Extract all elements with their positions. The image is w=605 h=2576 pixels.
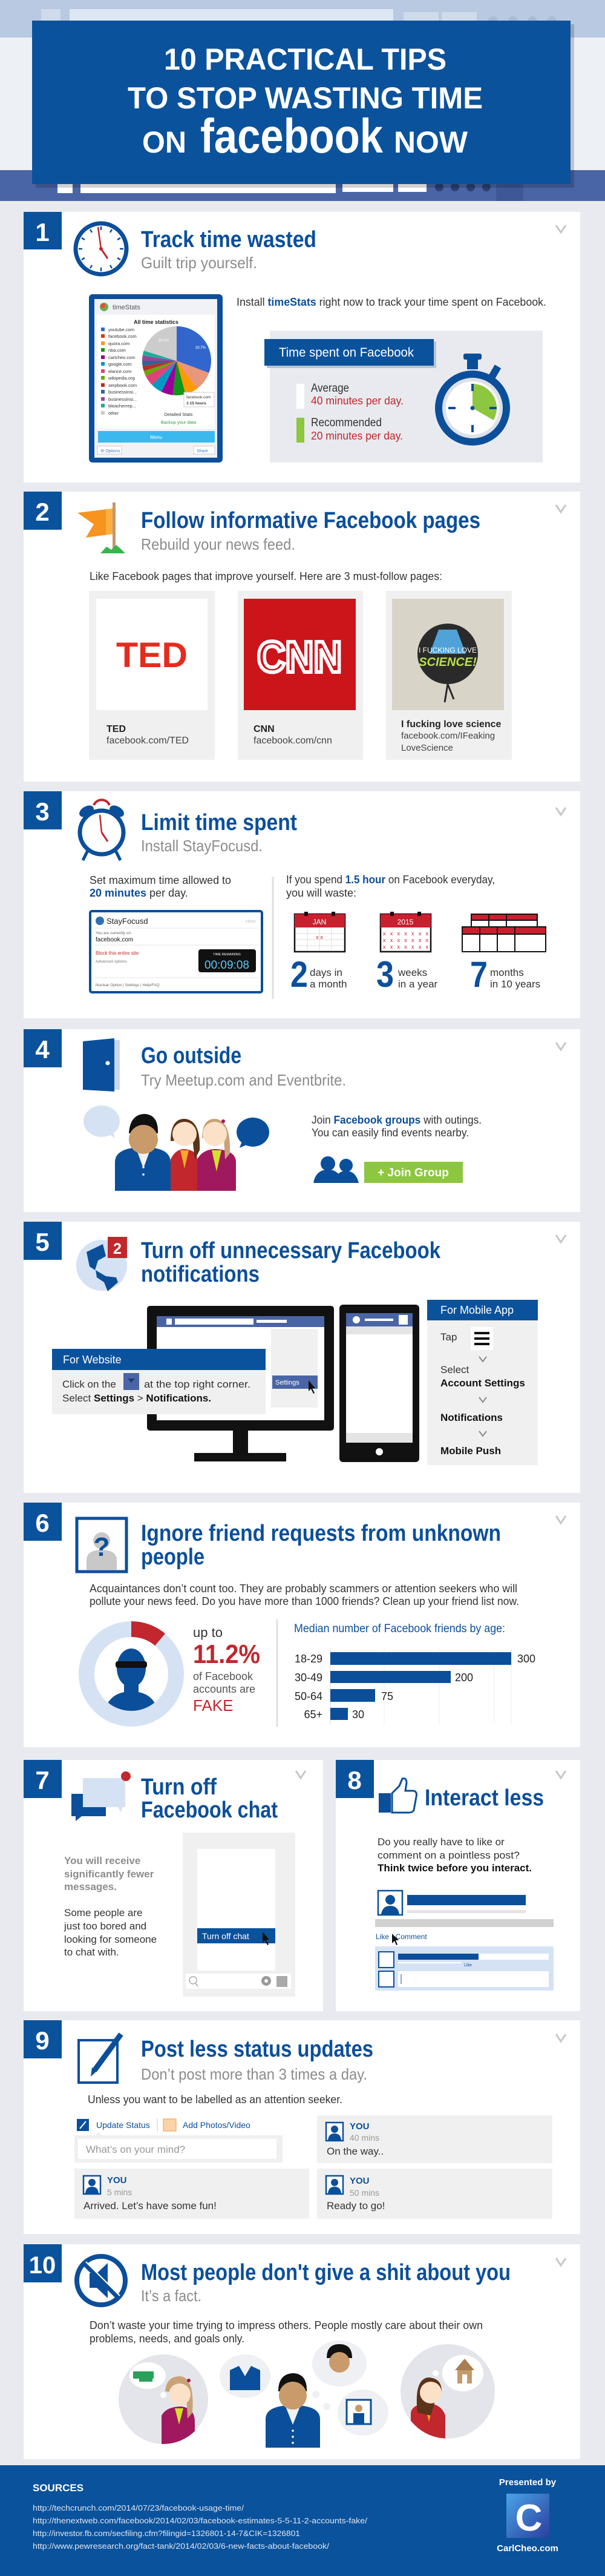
timeStats screenshot: wikipedia.org	[108, 375, 135, 381]
icon: calendar JAN	[295, 912, 345, 952]
panel: for mobile app: Account Settings	[440, 1377, 525, 1389]
chat sidebar mock	[183, 1833, 295, 1997]
bar chart: median friends by age: 75	[381, 1690, 393, 1702]
icon: calendars stack	[462, 914, 546, 952]
time spent box: Average	[311, 382, 349, 395]
text 7: to chat with.	[64, 1946, 119, 1958]
icon: clock	[76, 223, 126, 274]
text: if you spend: you will waste:	[286, 887, 356, 899]
install text: Install timeStats right now to track your time spent on Facebook.	[237, 296, 546, 308]
StayFocusd screenshot: Advanced options	[96, 960, 127, 964]
stat: 11.2% fake: 11.2%	[193, 1639, 260, 1669]
heading 3: Install StayFocusd.	[141, 837, 263, 855]
title banner: facebook	[200, 109, 383, 163]
icon: group	[313, 1156, 359, 1183]
timeStats screenshot: 1:15 hours	[186, 401, 206, 406]
timeStats screenshot: businessinsi...	[108, 397, 137, 402]
StayFocusd screenshot: StayFocusd	[106, 917, 148, 926]
heading 10: Most people don't give a shit about you	[141, 2260, 511, 2285]
number 1	[24, 212, 62, 249]
header background	[0, 0, 605, 201]
post: 50 mins: YOU	[350, 2176, 370, 2186]
sources: http://investor.fb.com/secfiling.cfm?filingid=1326801-14-7&CIK=1326801	[33, 2529, 300, 2538]
timeStats screenshot: other	[108, 410, 119, 416]
number 6: 6	[35, 1509, 50, 1537]
text: join groups: Join Facebook groups with outings.	[312, 1114, 482, 1126]
heading 8: Interact less	[425, 1785, 544, 1811]
card: CNN: facebook.com/cnn	[253, 736, 332, 746]
footer: sources and credit	[0, 2465, 605, 2576]
text: set max time	[90, 874, 231, 899]
stat: 3 weeks: 3	[376, 954, 394, 995]
illustration: man thinking about himself	[220, 2340, 388, 2448]
status composer: Add Photos/Video	[183, 2120, 250, 2130]
monitor: Settings	[275, 1379, 299, 1386]
number 4: 4	[35, 1035, 50, 1064]
post: 40 mins	[317, 2115, 552, 2163]
pie chart	[142, 326, 211, 395]
icon: calendar 2015: xxxxxxx	[383, 937, 428, 943]
bar chart: median friends by age: 65+	[304, 1708, 322, 1721]
pie chart: 20.1%	[159, 339, 169, 343]
credit logo: Presented by	[499, 2477, 557, 2488]
number 2: 2	[35, 498, 50, 526]
text: if you spend	[286, 874, 495, 899]
panel 2: follow informative pages	[24, 492, 580, 782]
number 7: 7	[35, 1766, 50, 1794]
text: set max time: Set maximum time allowed to	[90, 874, 231, 886]
icon: stopwatch	[435, 354, 510, 446]
post: 5 mins: Arrived. Let’s have some fun!	[83, 2200, 217, 2212]
stat: 11.2% fake: accounts are	[193, 1683, 255, 1695]
timeStats screenshot	[89, 294, 223, 463]
stat: 2 days: 2	[290, 954, 308, 995]
panel 7: turn off chat	[24, 1760, 323, 2011]
text 7: just too bored and	[64, 1920, 146, 1932]
number 2	[24, 492, 62, 530]
icon: unknown person: ?	[94, 1532, 110, 1562]
card: CNN	[238, 591, 363, 760]
timeStats screenshot: carlcheo.com	[108, 355, 136, 360]
stat: 7 months: 7	[470, 954, 488, 995]
icon: flag	[77, 502, 125, 553]
stat: 2 days: days in	[310, 967, 342, 978]
card: TED	[89, 591, 215, 760]
time spent box	[264, 331, 543, 463]
heading 5	[141, 1238, 441, 1287]
sources: http://thenextweb.com/facebook/2014/02/03/facebook-estimates-5-5-11-2-accounts-fake/	[33, 2516, 367, 2525]
donut chart: fake accounts	[87, 1629, 176, 1719]
panel 6: ignore friend requests	[24, 1503, 580, 1747]
post: 5 mins: 5 mins	[107, 2187, 132, 2197]
heading 7: Facebook chat	[141, 1797, 278, 1823]
bar chart: median friends by age: 30-49	[295, 1672, 322, 1684]
card: CNN: CNN	[257, 633, 342, 682]
title banner: NOW	[394, 125, 468, 159]
sources: http://www.pewresearch.org/fact-tank/2014/02/03/6-new-facts-about-facebook/	[33, 2541, 329, 2551]
icon: chat bubbles	[71, 1771, 131, 1821]
number 10: 10	[29, 2252, 56, 2279]
panel: for mobile app: Tap	[440, 1331, 457, 1343]
text 7: significantly fewer	[64, 1868, 154, 1880]
status composer	[74, 2119, 283, 2163]
stat: 2 days	[290, 954, 347, 995]
card: I fucking love science: I FUCKING LOVE	[419, 646, 477, 654]
number 3: 3	[35, 797, 50, 826]
heading 7: Turn off	[141, 1774, 217, 1800]
heading 10: It’s a fact.	[141, 2287, 201, 2305]
text 7: Some people are	[64, 1907, 142, 1919]
number 10	[24, 2244, 62, 2282]
icon: calendar 2015	[381, 912, 431, 952]
number 5: 5	[35, 1228, 50, 1256]
paragraph 10	[90, 2319, 483, 2345]
stat: 11.2% fake: of Facebook	[193, 1670, 253, 1682]
heading 4: Try Meetup.com and Eventbrite.	[141, 1071, 346, 1089]
timeStats screenshot: bleacherrep...	[108, 403, 136, 409]
number 6	[24, 1503, 62, 1541]
card: I fucking love science	[386, 591, 512, 760]
heading 10	[141, 2260, 511, 2305]
sources: SOURCES	[33, 2482, 83, 2494]
time spent box: 40 minutes per day.	[311, 395, 404, 407]
icon: globe with badge	[76, 1237, 127, 1291]
heading 6: Ignore friend requests from unknown	[141, 1521, 501, 1546]
sources	[33, 2482, 367, 2551]
timeStats screenshot: All time statistics	[134, 319, 178, 325]
stat: 3 weeks	[376, 954, 438, 995]
stat: 2 days: a month	[310, 978, 347, 990]
stat: 3 weeks: in a year	[398, 978, 438, 990]
heading 5: notifications	[141, 1262, 260, 1287]
credit logo	[497, 2477, 558, 2554]
icon: calendar JAN: x x	[316, 934, 323, 940]
button: join group: + Join Group	[378, 1167, 449, 1179]
post: 5 mins	[74, 2169, 309, 2219]
panel 3: limit time spent	[24, 791, 580, 1018]
post: 5 mins: YOU	[107, 2175, 127, 2186]
heading 4	[141, 1043, 346, 1089]
bar chart: median friends by age: 30	[352, 1708, 364, 1721]
card: I fucking love science: facebook.com/IFeaking	[401, 731, 495, 741]
heading 3: Limit time spent	[141, 810, 297, 835]
StayFocusd screenshot: close	[246, 920, 255, 924]
text: if you spend: If you spend 1.5 hour on Facebook everyday,	[286, 874, 495, 886]
text: set max time: 20 minutes per day.	[90, 887, 188, 899]
text 8: Do you really have to like or	[378, 1836, 505, 1848]
heading 3	[141, 810, 297, 855]
StayFocusd screenshot	[90, 911, 262, 992]
panel 2: follow informative pages: Like Facebook pages that improve yourself. Here are 3 must-follow pages:	[90, 570, 442, 582]
heading 9	[141, 2037, 373, 2083]
heading 6: people	[141, 1544, 204, 1570]
heading 1: Guilt trip yourself.	[141, 254, 257, 272]
timeStats screenshot: facebook.com	[108, 334, 137, 339]
heading 2: Rebuild your news feed.	[141, 535, 295, 553]
text 7: messages.	[64, 1881, 117, 1892]
heading 4: Go outside	[141, 1043, 241, 1069]
panel: for website	[52, 1349, 266, 1414]
timeStats screenshot: elance.com	[108, 369, 131, 374]
post: 50 mins: 50 mins	[350, 2188, 379, 2198]
stat: 3 weeks: weeks	[397, 967, 427, 978]
post: 40 mins: 40 mins	[350, 2133, 379, 2143]
panel 1: track time wasted	[24, 212, 580, 483]
text 8	[378, 1836, 532, 1874]
panel: for website: Click on the	[62, 1379, 116, 1390]
text: join groups: You can easily find events nearby.	[312, 1127, 469, 1139]
post: 50 mins	[317, 2169, 552, 2219]
StayFocusd screenshot: You are currently on:	[96, 931, 132, 935]
text 8: comment on a pointless post?	[378, 1850, 520, 1861]
status composer: Update Status	[96, 2120, 150, 2130]
number 8: 8	[347, 1766, 362, 1794]
StayFocusd screenshot: 00:09:08	[204, 959, 249, 972]
text 7: You will receive	[64, 1855, 140, 1866]
icon: door	[83, 1038, 120, 1092]
StayFocusd screenshot: Block this entire site	[96, 950, 139, 956]
bar chart: median friends by age: 200	[455, 1672, 473, 1684]
button: join group	[364, 1162, 463, 1183]
title banner: TO STOP WASTING TIME	[128, 81, 483, 115]
post mock: Like · Comment	[376, 1932, 427, 1941]
text 8: Think twice before you interact.	[378, 1862, 532, 1874]
panel: for mobile app: For Mobile App	[440, 1304, 514, 1316]
icon: alarm clock	[77, 800, 126, 860]
timeStats screenshot: google.com	[108, 361, 132, 367]
credit logo: C	[515, 2497, 542, 2539]
icon: calendar 2015: xxxxxxx	[383, 931, 428, 937]
title banner	[32, 21, 574, 188]
illustration: three friends	[83, 1105, 269, 1191]
card: I fucking love science: SCIENCE!	[419, 656, 477, 669]
post mock	[375, 1891, 554, 1991]
number 1: 1	[35, 218, 50, 246]
panel: for mobile app: Notifications	[440, 1412, 503, 1423]
stat: 11.2% fake	[193, 1625, 260, 1715]
panel: for website: Select Settings > Notifications.	[62, 1392, 211, 1404]
card: TED: TED	[116, 636, 188, 675]
heading 9: Don’t post more than 3 times a day.	[141, 2065, 367, 2083]
paragraph 6: Acquaintances don’t count too. They are probably scammers or attention seekers who will	[90, 1583, 517, 1595]
icon: muted speaker	[77, 2256, 125, 2305]
heading 7	[141, 1774, 278, 1823]
text: join groups	[312, 1114, 482, 1139]
text 7	[64, 1855, 157, 1958]
title banner: ON	[142, 125, 186, 159]
illustration: woman thinking about home	[401, 2344, 495, 2440]
card: CNN: CNN	[253, 724, 275, 734]
icon: calendar 2015: 2015	[397, 918, 414, 926]
time spent box: 20 minutes per day.	[311, 430, 403, 442]
text 7: looking for someone	[64, 1934, 157, 1945]
timeStats screenshot: Menu	[150, 435, 162, 440]
card: TED: TED	[106, 724, 126, 734]
paragraph 6: pollute your news feed. Do you have more than 1000 friends? Clean up your friend list now.	[90, 1595, 519, 1607]
stat: 7 months	[470, 954, 540, 995]
timeStats screenshot: Backup your data	[161, 420, 197, 425]
timeStats screenshot: nba.com	[108, 348, 126, 353]
post: 40 mins: On the way..	[327, 2146, 384, 2157]
icon: pencil and pad	[79, 2034, 121, 2083]
title banner: 10 PRACTICAL TIPS	[164, 42, 446, 76]
number 8	[336, 1760, 374, 1798]
heading 2	[141, 508, 480, 553]
heading 5: Turn off unnecessary Facebook	[141, 1238, 441, 1263]
time spent box: Recommended	[311, 417, 382, 429]
number 7	[24, 1760, 62, 1798]
StayFocusd screenshot: Nuclear Option | Settings | Help/FAQ	[96, 983, 160, 987]
panel: for mobile app	[427, 1300, 538, 1465]
paragraph 6	[90, 1583, 519, 1607]
panel 9: post less status updates	[24, 2020, 580, 2234]
number 9: 9	[35, 2026, 50, 2055]
heading 9: Post less status updates	[141, 2037, 373, 2062]
bar chart: median friends by age	[294, 1622, 535, 1724]
chevron	[556, 225, 566, 232]
timeStats screenshot: facebook.com	[186, 395, 211, 400]
panel 4: go outside	[24, 1029, 580, 1212]
timeStats screenshot: quora.com	[108, 341, 129, 346]
panel 9: post less status updates: Unless you want to be labelled as an attention seeker.	[88, 2093, 342, 2106]
time spent box: Time spent on Facebook	[279, 346, 414, 360]
illustration: woman thinking about money	[119, 2354, 208, 2446]
icon: calendar 2015: xxxxxxx	[383, 944, 428, 950]
panel 5: notifications	[24, 1222, 580, 1493]
number 9	[24, 2020, 62, 2058]
icon: thumbs up	[379, 1779, 416, 1813]
card: I fucking love science: I fucking love science	[401, 719, 501, 730]
timeStats screenshot: youtube.com	[108, 327, 134, 332]
panel: for website: at the top right corner.	[144, 1379, 250, 1390]
number 4	[24, 1029, 62, 1067]
heading 1	[141, 227, 316, 272]
status composer: What’s on your mind?	[86, 2144, 185, 2155]
stat: 7 months: months	[490, 967, 524, 978]
heading 2: Follow informative Facebook pages	[141, 508, 480, 533]
bar chart: median friends by age: 50-64	[295, 1690, 322, 1702]
sources: http://techcrunch.com/2014/07/23/facebook-usage-time/	[33, 2503, 244, 2512]
paragraph 10: Don’t waste your time trying to impress others. People mostly care about their own	[90, 2319, 483, 2331]
panel 8: interact less	[336, 1760, 580, 2011]
heading 6	[141, 1521, 501, 1570]
post: 40 mins: YOU	[350, 2121, 370, 2132]
bar chart: median friends by age: 18-29	[295, 1653, 322, 1665]
StayFocusd screenshot: facebook.com	[96, 937, 133, 943]
heading 1: Track time wasted	[141, 227, 316, 252]
timeStats screenshot: businessinsi...	[108, 389, 137, 395]
post: 50 mins: Ready to go!	[327, 2200, 385, 2212]
panel: for website: For Website	[63, 1354, 122, 1366]
pie chart: 30.7%	[195, 346, 206, 350]
timeStats screenshot: timeStats	[113, 304, 140, 311]
stat: 7 months: in 10 years	[490, 978, 540, 990]
card: I fucking love science: LoveScience	[401, 743, 453, 753]
bar chart: median friends by age: Median number of Facebook friends by age:	[294, 1622, 505, 1635]
panel: for mobile app: Select	[440, 1364, 469, 1375]
paragraph 10: problems, needs, and goals only.	[90, 2333, 244, 2345]
timeStats screenshot: Detailed Stats	[165, 412, 193, 417]
StayFocusd screenshot: TIME REMAINING	[213, 953, 241, 957]
icon: unknown person	[77, 1518, 126, 1572]
chat sidebar mock: Turn off chat	[202, 1931, 249, 1941]
icon: globe with badge: 2	[113, 1240, 122, 1257]
number 3	[24, 791, 62, 829]
icon: calendar JAN: JAN	[313, 918, 326, 926]
timeStats screenshot: ⚙ Options	[100, 449, 120, 453]
post mock: Like	[464, 1963, 472, 1968]
credit logo: CarlCheo.com	[497, 2543, 558, 2554]
phone	[339, 1305, 419, 1462]
card: TED: facebook.com/TED	[106, 736, 189, 746]
number 5	[24, 1222, 62, 1260]
stat: 11.2% fake: up to	[193, 1625, 223, 1640]
panel 10: most people don't care	[24, 2244, 580, 2459]
panel: for mobile app: Mobile Push	[440, 1445, 501, 1457]
bar chart: median friends by age: 300	[517, 1653, 535, 1665]
timeStats screenshot: serpbook.com	[108, 383, 137, 388]
stat: 11.2% fake: FAKE	[193, 1696, 233, 1715]
monitor	[147, 1306, 334, 1461]
timeStats screenshot: Share	[197, 449, 208, 453]
